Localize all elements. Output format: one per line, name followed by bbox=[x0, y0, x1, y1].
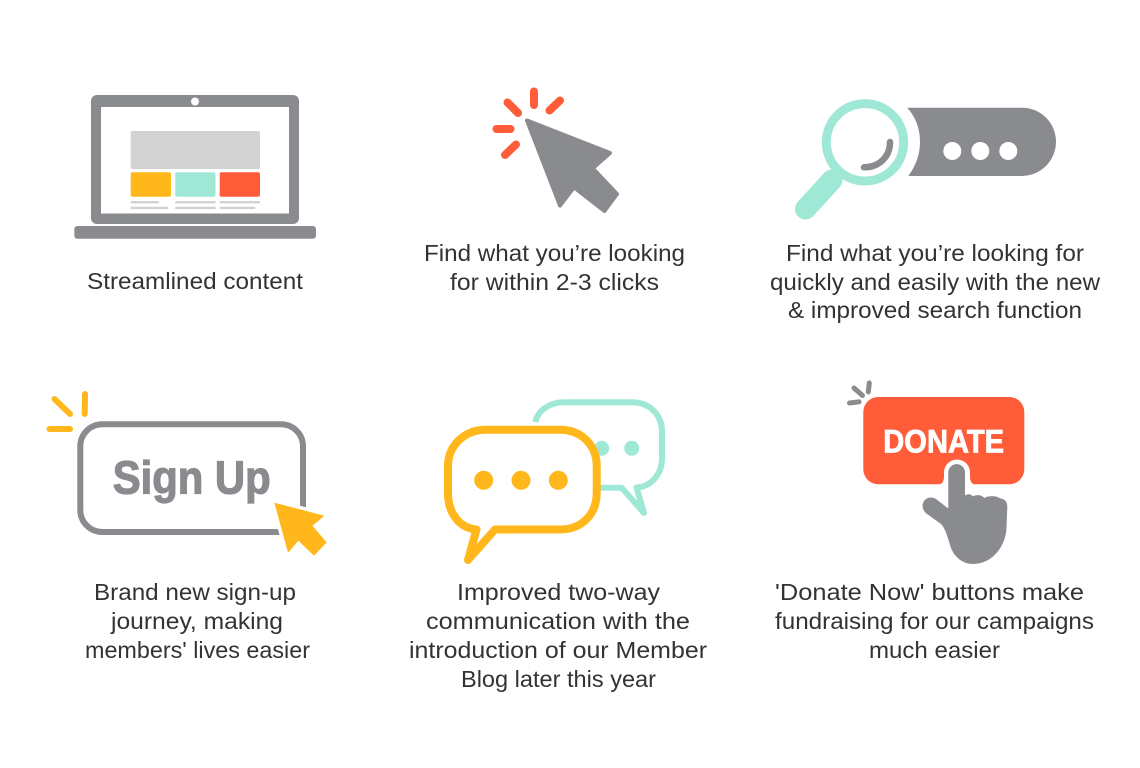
text: sign-up caption: members' lives easier bbox=[85, 637, 310, 663]
text: communication caption: communication with the bbox=[426, 608, 690, 634]
text: search caption: quickly and easily with the new bbox=[770, 269, 1100, 295]
icon: cursor with click rays bbox=[496, 92, 617, 211]
text: search caption: Find what you’re looking for bbox=[786, 240, 1084, 266]
text: clicks caption: for within 2-3 clicks bbox=[450, 269, 659, 295]
icon: speech bubbles bbox=[448, 402, 662, 560]
text: sign-up caption bbox=[85, 579, 310, 663]
text: donate caption bbox=[775, 579, 1094, 663]
text: search caption bbox=[770, 240, 1100, 323]
text: donate caption: much easier bbox=[869, 637, 1000, 663]
text: communication caption: Improved two-way bbox=[457, 579, 661, 605]
text: donate caption: fundraising for our campaigns bbox=[775, 608, 1094, 634]
text: sign-up caption: Brand new sign-up bbox=[94, 579, 296, 605]
text: clicks caption bbox=[424, 240, 685, 295]
text: search caption: & improved search function bbox=[788, 297, 1082, 323]
icon: donate button with hand bbox=[850, 383, 1024, 564]
icon: sign up button with cursor bbox=[50, 394, 326, 555]
text: clicks caption: Find what you’re looking bbox=[424, 240, 685, 266]
text: donate caption: 'Donate Now' buttons make bbox=[775, 579, 1084, 605]
text: communication caption: Blog later this year bbox=[461, 666, 656, 692]
icon: magnifier and search bar bbox=[806, 104, 1056, 209]
text: sign-up caption: journey, making bbox=[110, 608, 283, 634]
icon: sign up button with cursor: Sign Up bbox=[113, 452, 271, 504]
icon: laptop bbox=[74, 95, 316, 239]
text: communication caption bbox=[409, 579, 707, 692]
text: communication caption: introduction of our Member bbox=[409, 637, 707, 663]
text: streamlined content: Streamlined content bbox=[87, 268, 304, 294]
icon: donate button with hand: DONATE bbox=[883, 424, 1004, 460]
